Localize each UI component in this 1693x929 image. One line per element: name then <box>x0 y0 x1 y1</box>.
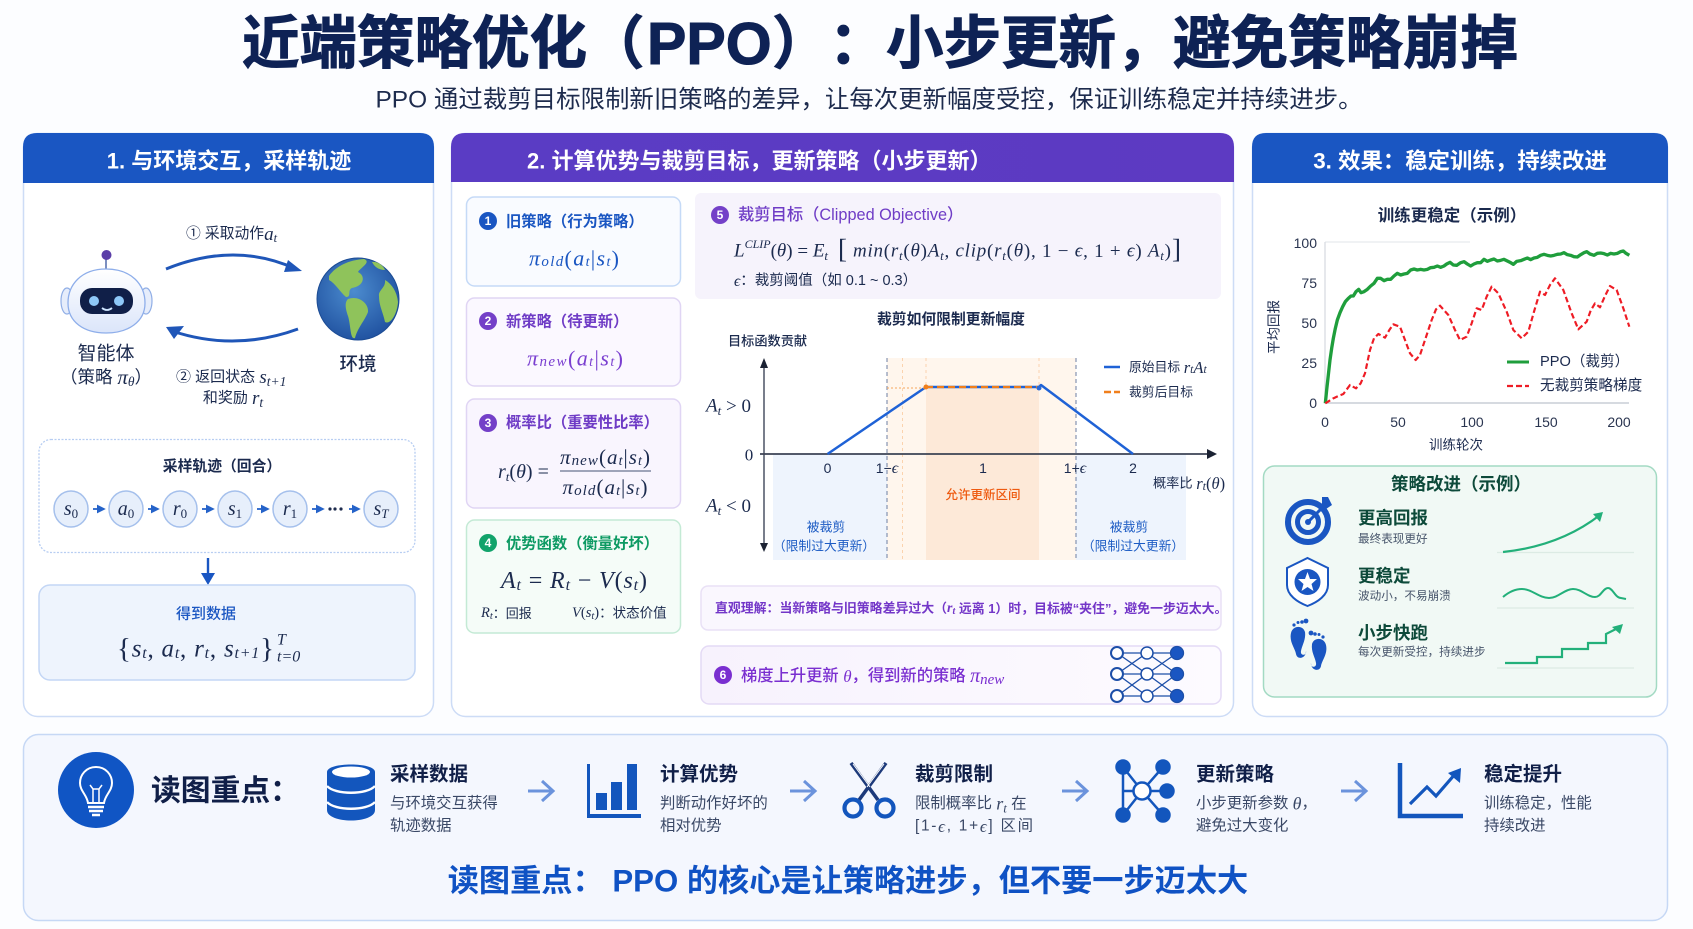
callout: intuition <box>701 586 1227 630</box>
card 4: advantage function: ：回报 <box>493 606 532 620</box>
step: update policy: 更新策略 <box>1196 762 1274 786</box>
tick labels: 0 <box>745 446 753 464</box>
card 5: clipped objective: ( <box>1007 240 1013 262</box>
card 2: new policy <box>466 298 680 386</box>
icon: database <box>327 764 375 820</box>
box: sampled trajectory <box>39 440 415 552</box>
tick labels <box>704 396 1225 518</box>
axis tick labels: 75 <box>1301 275 1317 291</box>
card 4: advantage function: 优势函数（衡量好坏） <box>506 534 659 552</box>
box: resulting data: , <box>180 636 193 662</box>
card 5: clipped objective: θ), 1 − ϵ, 1 + ϵ) A <box>1014 240 1160 262</box>
card 6: gradient ascent update <box>701 646 1221 704</box>
step: clip limit: 裁剪限制 <box>915 764 993 786</box>
box: resulting data: } <box>260 633 274 665</box>
card 5: clipped objective: θ) = E <box>777 240 824 262</box>
step: update policy: 避免过大变化 <box>1196 816 1288 834</box>
panel header 1 <box>23 133 434 183</box>
arrow <box>790 781 815 801</box>
icon: target <box>1288 497 1332 542</box>
card 1: old policy: old <box>541 254 564 270</box>
card 1: old policy: ) <box>612 246 619 270</box>
card 2: new policy: 新策略（待更新） <box>506 312 628 330</box>
tick labels: 0 <box>824 460 832 476</box>
card 1: old policy: t <box>606 254 611 270</box>
chart legend <box>1104 358 1207 400</box>
card 2: new policy: ( <box>568 346 575 370</box>
axis tick labels: 0 <box>1309 395 1317 411</box>
card 3: probability ratio: ) <box>640 475 648 499</box>
label: agent: 智能体 <box>77 342 135 364</box>
tick labels: 2 <box>1129 460 1137 476</box>
card 4: advantage function: A <box>501 568 516 594</box>
trajectory nodes: s <box>228 498 236 520</box>
icon: bar chart <box>587 764 641 818</box>
tick labels: A <box>706 396 718 416</box>
card 1: old policy: π <box>529 246 540 270</box>
callout: intuition: 直观理解：当新策略与旧策略差异过大（r <box>715 600 952 616</box>
axis titles: 平均回报 <box>1266 300 1282 354</box>
tick labels: 1 <box>979 460 987 476</box>
card 2: new policy: ) <box>616 346 623 370</box>
label: state and reward: 和奖励 r <box>203 388 259 408</box>
card 4: advantage function: ) <box>594 605 599 621</box>
card 2: new policy: π <box>527 346 538 370</box>
label: agent: θ <box>128 374 135 388</box>
tick labels: > 0 <box>721 396 751 416</box>
axis tick labels: 200 <box>1607 414 1631 430</box>
clipped objective line <box>887 384 1042 390</box>
box: resulting data: {s <box>117 633 141 665</box>
step: compute advantage: 相对优势 <box>660 816 722 834</box>
title: ） <box>772 12 830 76</box>
card 3: probability ratio: t <box>636 484 641 498</box>
callout: intuition: t <box>952 606 956 616</box>
chart: how clipping limits updates <box>704 310 1225 560</box>
tick labels: t <box>718 402 722 418</box>
card 3: probability ratio: a <box>605 475 615 499</box>
line: no clipping <box>1325 278 1629 403</box>
card 3: probability ratio <box>466 399 680 508</box>
title: PPO <box>647 11 772 77</box>
card 5: clipped objective: L <box>734 240 745 262</box>
step: stable improvement: 训练稳定，性能 <box>1484 794 1592 812</box>
axis tick labels: 100 <box>1294 235 1317 251</box>
tick labels: A <box>706 496 718 516</box>
box: resulting data: s <box>224 636 234 662</box>
box: resulting data: t <box>142 644 147 662</box>
step: compute advantage <box>660 762 768 834</box>
card 5: clipped objective: [ <box>838 234 847 264</box>
step: stable improvement <box>1484 762 1592 834</box>
label: state and reward <box>176 366 286 410</box>
card 4: advantage function: t <box>517 576 522 594</box>
card 5: clipped objective: ϵ：裁剪阈值（如 0.1 ~ 0.3） <box>734 271 917 290</box>
card 3: probability ratio: π <box>560 445 571 469</box>
item: higher return <box>1358 508 1428 546</box>
card 3: probability ratio: 概率比（重要性比率） <box>506 414 659 432</box>
trajectory nodes: s <box>373 498 381 520</box>
line: PPO clipped <box>1325 251 1629 403</box>
panel header 2: 2. 计算优势与裁剪目标，更新策略（小步更新） <box>527 148 991 174</box>
step: compute advantage: 计算优势 <box>660 762 738 786</box>
chart: training stability <box>1266 205 1643 452</box>
card 2: new policy: | <box>594 346 599 370</box>
card 5: clipped objective: t <box>824 248 828 262</box>
chart legend <box>1507 352 1643 394</box>
mini chart: stairs <box>1497 624 1634 668</box>
panel header 2 <box>451 133 1234 182</box>
trajectory nodes <box>54 491 398 527</box>
axis tick labels: 50 <box>1390 414 1406 430</box>
clipped left label: 被裁剪 <box>807 520 845 534</box>
card 4: advantage function: 4 <box>485 536 492 550</box>
icon: footprints <box>1291 619 1326 670</box>
card 4: advantage function: ) <box>639 568 647 594</box>
axis tick labels: 50 <box>1301 315 1317 331</box>
tick labels: ( <box>1206 474 1212 492</box>
axis titles <box>1266 300 1483 452</box>
step: clip limit: t <box>1003 800 1007 815</box>
icon: light bulb <box>58 752 134 828</box>
card 2: new policy: s <box>600 346 609 370</box>
label: state and reward: t+1 <box>267 374 286 388</box>
axis tick labels: 0 <box>1321 414 1329 430</box>
card 3: probability ratio: old <box>574 483 596 499</box>
chart legend: 裁剪后目标 <box>1129 384 1193 400</box>
card 3: probability ratio: t <box>506 468 510 484</box>
card 4: advantage function <box>466 520 680 633</box>
step: clip limit <box>915 764 1033 836</box>
card 5: clipped objective: θ)A <box>911 240 939 262</box>
box: resulting data: , <box>147 636 161 662</box>
card 5: clipped objective: t <box>899 248 903 262</box>
card 6: gradient ascent update: 梯度上升更新 θ，得到新的策略 π <box>741 665 980 687</box>
card 3: probability ratio: new <box>572 453 598 469</box>
icon: neural network <box>1111 646 1184 702</box>
card 2: new policy: 2 <box>485 314 492 328</box>
item: higher return: 更高回报 <box>1358 508 1428 528</box>
trajectory nodes: T <box>381 506 389 520</box>
panel: step 3 effect <box>1252 133 1668 716</box>
box: resulting data: a <box>162 636 174 662</box>
card 5: clipped objective: CLIP <box>745 237 771 251</box>
takeaway line: 读图重点： PPO 的核心是让策略进步，但不要一步迈太大 <box>448 864 1248 898</box>
panel: step 1 sampling <box>23 133 434 716</box>
card 4: advantage function: = <box>522 568 549 594</box>
axis titles: 训练轮次 <box>1429 438 1483 452</box>
mini chart: rising curve <box>1497 512 1634 552</box>
card 2: new policy: new <box>539 354 567 370</box>
card 5: clipped objective: 裁剪目标（Clipped Objective） <box>738 206 963 224</box>
card 5: clipped objective <box>695 193 1221 299</box>
box: resulting data: t <box>175 644 180 662</box>
card 3: probability ratio: s <box>629 445 637 469</box>
card 3: probability ratio: θ) = <box>516 461 549 483</box>
box: resulting data <box>39 585 415 680</box>
icon: scissors <box>844 763 894 816</box>
chart legend: 原始目标 r <box>1129 358 1190 376</box>
trajectory nodes: 0 <box>128 506 134 520</box>
trajectory nodes: 0 <box>72 506 78 520</box>
tick labels: t <box>1203 479 1207 493</box>
axes <box>760 358 1217 552</box>
chart legend: 无裁剪策略梯度 <box>1540 376 1643 394</box>
card 1: old policy: a <box>573 246 584 270</box>
label: environment: 环境 <box>339 354 377 374</box>
axis tick labels: 25 <box>1301 355 1317 371</box>
item: small fast steps: 小步快跑 <box>1358 623 1428 643</box>
card 4: advantage function: R <box>480 605 490 621</box>
card 2: new policy: a <box>577 346 588 370</box>
card 3: probability ratio: ) <box>643 445 650 469</box>
label: state and reward: t <box>259 394 264 410</box>
chart legend: t <box>1203 364 1207 376</box>
arrow <box>528 781 553 801</box>
step: sample data: 采样数据 <box>390 764 468 786</box>
step: sample data: 与环境交互获得 <box>390 793 498 812</box>
card 3: probability ratio: r <box>498 461 506 483</box>
clipped left label <box>773 520 875 554</box>
label: action: ① 采取动作a <box>186 224 274 244</box>
chart legend: A <box>1192 358 1204 376</box>
card 3: probability ratio: | <box>621 475 625 499</box>
title: 避免策略崩掉 <box>1173 12 1518 76</box>
label: state and reward: ② 返回状态 s <box>176 366 267 388</box>
card 1: old policy: ( <box>565 246 572 270</box>
card 3: probability ratio: t <box>616 484 621 498</box>
card 5: clipped objective: ( <box>903 240 910 262</box>
label: action: t <box>274 231 278 245</box>
step: clip limit: 限制概率比 r <box>915 794 1003 814</box>
card 3: probability ratio: a <box>607 445 618 469</box>
chart: how clipping limits updates: 目标函数贡献 <box>728 334 807 348</box>
card 2: new policy: t <box>589 354 594 370</box>
chart legend: PPO（裁剪） <box>1540 352 1629 370</box>
clipped left label: （限制过大更新） <box>773 538 875 554</box>
box: resulting data: t <box>205 644 210 662</box>
trajectory nodes: r <box>173 498 181 520</box>
box: sampled trajectory: 采样轨迹（回合） <box>163 457 281 475</box>
card 5: clipped objective: ) <box>1165 240 1171 262</box>
box: resulting data: 得到数据 <box>176 606 236 622</box>
panel: key takeaways <box>24 734 1668 920</box>
label: agent: （策略 π <box>60 365 128 389</box>
card 5: clipped objective: clip(r <box>955 240 1002 262</box>
icon: shield <box>1287 558 1328 606</box>
icon: network <box>1116 760 1174 822</box>
tick labels: 1−ϵ <box>876 460 899 476</box>
card 3: probability ratio: π <box>562 475 573 499</box>
icon: robot agent <box>61 250 152 333</box>
card 3: probability ratio: 3 <box>485 416 492 430</box>
item: more stable: 波动小，不易崩溃 <box>1358 588 1451 602</box>
step: stable improvement: 稳定提升 <box>1484 762 1562 786</box>
card 6: gradient ascent update: 6 <box>720 668 727 682</box>
card 4: advantage function: t <box>591 610 595 622</box>
trajectory nodes: 1 <box>236 506 242 520</box>
arrow <box>1341 781 1366 801</box>
icon: globe environment <box>317 258 399 340</box>
card 1: old policy: s <box>597 246 605 270</box>
box: policy improvement: 策略改进（示例） <box>1391 474 1531 494</box>
card 4: advantage function: R <box>550 568 565 594</box>
box: resulting data: t=0 <box>277 648 300 666</box>
trajectory nodes: r <box>283 498 291 520</box>
step: clip limit: [1-ϵ, 1+ϵ] 区间 <box>915 816 1033 836</box>
subtitle: PPO 通过裁剪目标限制新旧策略的差异，让每次更新幅度受控，保证训练稳定并持续进步。 <box>375 86 1363 114</box>
title: 小步更新， <box>886 12 1174 76</box>
card 3: probability ratio: | <box>624 445 628 469</box>
card 5: clipped objective: ( <box>771 240 777 262</box>
axis tick labels <box>1294 235 1631 430</box>
heading: key points: 读图重点： <box>151 774 300 808</box>
card 1: old policy: 1 <box>485 214 492 228</box>
arrow <box>1062 781 1087 801</box>
item: small fast steps <box>1358 623 1486 658</box>
card 5: clipped objective: t <box>1160 248 1164 262</box>
card 5: clipped objective: ] <box>1172 234 1181 264</box>
box: resulting data: r <box>194 636 204 662</box>
trajectory nodes: 1 <box>291 506 297 520</box>
arrow: state and reward back <box>166 326 298 341</box>
panel header 3: 3. 效果：稳定训练，持续改进 <box>1313 148 1607 174</box>
box: resulting data: , <box>210 636 223 662</box>
original objective line <box>828 385 1133 454</box>
clipped right label <box>1082 520 1184 554</box>
card 4: advantage function: V(s <box>599 568 633 594</box>
box: resulting data: T <box>277 632 287 648</box>
tick labels: 概率比 r <box>1153 474 1203 492</box>
card 1: old policy: 旧策略（行为策略） <box>506 212 644 230</box>
item: higher return: 最终表现更好 <box>1358 532 1428 546</box>
panel: step 2 advantage and clipping <box>451 133 1234 716</box>
card 4: advantage function: t <box>490 610 494 622</box>
title: 近端策略优化（ <box>242 12 644 76</box>
arrow: to data <box>201 558 215 585</box>
arrow: action to environment <box>166 255 302 272</box>
chart: training stability: 训练更稳定（示例） <box>1378 205 1526 225</box>
card 3: probability ratio: ( <box>509 461 516 483</box>
label: agent <box>60 342 152 389</box>
tick labels: θ) <box>1212 474 1225 492</box>
card 5: clipped objective: 5 <box>717 208 724 222</box>
step: stable improvement: 持续改进 <box>1484 816 1546 834</box>
axis tick labels: 100 <box>1460 414 1484 430</box>
axis tick labels: 150 <box>1534 414 1558 430</box>
tick labels: 1+ϵ <box>1064 460 1087 476</box>
item: more stable: 更稳定 <box>1358 566 1410 586</box>
item: small fast steps: 每次更新受控，持续进步 <box>1358 644 1486 658</box>
card 3: probability ratio: t <box>638 454 643 468</box>
card 4: advantage function: ：状态价值 <box>599 606 667 620</box>
trajectory nodes: 0 <box>181 506 187 520</box>
step: sample data: 轨迹数据 <box>390 816 452 834</box>
card 1: old policy <box>466 197 680 286</box>
box: resulting data: t+1 <box>234 644 259 662</box>
shaded regions <box>773 358 1186 560</box>
clipped right label: 被裁剪 <box>1110 520 1148 534</box>
card 3: probability ratio: s <box>626 475 634 499</box>
icon: growth chart <box>1400 763 1463 816</box>
card 3: probability ratio: ( <box>599 445 606 469</box>
panel header 1: 1. 与环境交互，采样轨迹 <box>107 148 351 174</box>
callout: intuition: 远离 1）时，目标被“夹住”，避免一步迈太大。 <box>955 600 1227 616</box>
card 4: advantage function: t <box>634 576 639 594</box>
card 5: clipped objective: t <box>1002 248 1006 262</box>
step: update policy <box>1196 762 1317 834</box>
card 5: clipped objective: min(r <box>853 240 898 262</box>
chart: how clipping limits updates: 裁剪如何限制更新幅度 <box>877 310 1025 328</box>
panel header 3 <box>1252 133 1668 183</box>
tick labels: t <box>718 502 722 518</box>
card 3: probability ratio: ( <box>596 475 603 499</box>
step: update policy: 小步更新参数 θ， <box>1196 794 1317 814</box>
card 1: old policy: t <box>586 254 591 270</box>
card 5: clipped objective: t <box>940 248 944 262</box>
card 5: clipped objective: , <box>944 240 955 262</box>
box: policy improvement <box>1264 466 1656 697</box>
card 1: old policy: | <box>591 246 595 270</box>
card 4: advantage function: V(s <box>572 605 591 621</box>
card 4: advantage function: − <box>571 568 598 594</box>
title: ： <box>829 12 886 76</box>
tick labels: < 0 <box>721 496 751 516</box>
step: clip limit: 在 <box>1007 794 1027 812</box>
card 4: advantage function: t <box>566 576 571 594</box>
item: more stable <box>1358 566 1451 602</box>
step: compute advantage: 判断动作好坏的 <box>660 794 768 812</box>
step: sample data <box>390 764 498 834</box>
mini chart: stable wave <box>1497 588 1634 608</box>
trajectory nodes: a <box>118 498 128 520</box>
label: agent: ） <box>135 367 152 387</box>
card 3: probability ratio: t <box>619 454 624 468</box>
allowed region label: 允许更新区间 <box>945 487 1021 502</box>
clipped right label: （限制过大更新） <box>1082 538 1184 554</box>
trajectory nodes: s <box>64 498 72 520</box>
card 2: new policy: t <box>610 354 615 370</box>
chart legend: t <box>1190 364 1194 376</box>
card 6: gradient ascent update: new <box>980 672 1004 688</box>
